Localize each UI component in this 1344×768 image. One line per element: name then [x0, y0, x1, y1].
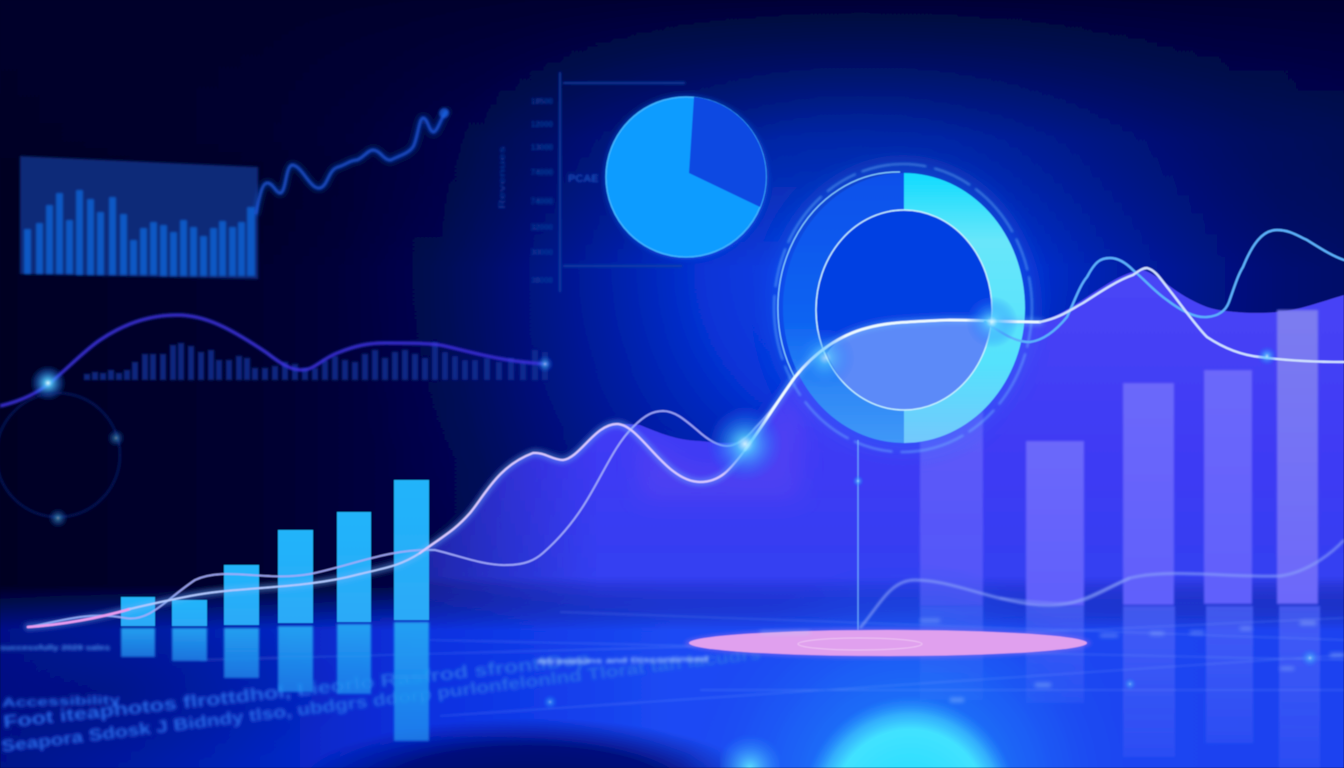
lower right wave	[860, 540, 1344, 628]
bars	[121, 480, 429, 626]
wide glow	[680, 560, 1140, 768]
area highlight under main wave	[640, 395, 800, 500]
inner lower disc	[827, 322, 992, 410]
dome	[800, 697, 1020, 768]
axis labels: 12000	[531, 120, 554, 129]
base line	[10, 383, 560, 385]
chart: mid-left wave with histogram	[0, 315, 560, 406]
wave line	[0, 315, 548, 406]
node	[30, 365, 66, 401]
text line: Nfrmations and Discontinued	[538, 656, 708, 666]
pie glow	[603, 94, 769, 260]
platform glow	[685, 628, 1091, 658]
main glowing wave	[28, 230, 1344, 627]
right bars	[920, 310, 1318, 606]
orbit circle with nodes	[0, 393, 125, 528]
right bar reflections	[920, 606, 1320, 768]
outer thin arc	[778, 172, 900, 378]
secondary light wave	[30, 385, 790, 627]
node	[536, 355, 554, 373]
small histogram	[84, 342, 548, 380]
floor grid	[200, 612, 1344, 716]
histogram bars	[24, 190, 255, 276]
trend line	[256, 112, 446, 213]
glow points	[542, 296, 1320, 710]
bar reflections	[121, 622, 429, 741]
platform ring	[798, 638, 922, 650]
text line: Seapora Sdosk J Bidndy tlso, ubdgrs ddorp purlonfelonlnd Tlorat tan lacudrs	[0, 644, 762, 756]
floor	[0, 585, 1344, 768]
wave bright section	[745, 320, 1040, 450]
chart: pie with axis	[497, 72, 769, 292]
blurred floor text	[0, 644, 762, 756]
node	[48, 508, 68, 528]
wave lilac section	[420, 424, 745, 553]
pie label: PCAE	[568, 173, 599, 185]
tick labels around ring	[774, 164, 1032, 452]
right wave B	[1040, 268, 1344, 362]
axis labels: 74000	[531, 197, 554, 206]
axis labels	[531, 97, 554, 285]
bottom cyan glow	[680, 560, 1140, 768]
axis labels: 38000	[531, 276, 554, 285]
right wave A	[985, 230, 1344, 342]
text line: successfully 2029 sales	[0, 645, 110, 652]
axis title: Revenues	[497, 146, 507, 209]
wave glow	[28, 320, 1040, 627]
node	[107, 429, 125, 447]
platform	[689, 630, 1087, 656]
wave pale section	[130, 553, 420, 609]
dark slice	[689, 97, 766, 207]
stem node	[852, 475, 864, 487]
axis frame	[560, 72, 685, 292]
orbit	[0, 393, 120, 517]
pie disc	[606, 97, 766, 257]
axis labels: 74000	[531, 168, 554, 177]
ring glow	[775, 166, 1031, 450]
axis labels: 13000	[531, 143, 554, 152]
axis labels: 18500	[531, 97, 554, 106]
purple area chart	[420, 270, 1344, 632]
arrow tip	[439, 108, 449, 118]
lower right wave 2	[1000, 578, 1130, 603]
right ring segment	[904, 173, 1025, 443]
small side glow	[720, 734, 780, 768]
text line: Accessibility	[2, 692, 121, 710]
axis labels: 32000	[531, 223, 554, 232]
vertical stem	[852, 440, 864, 630]
floor specks	[760, 619, 1344, 702]
panel background	[20, 156, 258, 279]
wave purple section	[28, 609, 130, 627]
inner disc	[816, 210, 992, 410]
pink platform	[685, 628, 1091, 658]
left ring segment	[783, 173, 904, 443]
ring chart	[774, 164, 1032, 452]
inner outline	[816, 210, 992, 410]
left bars	[121, 480, 429, 741]
panel: top-left bar chart with trend line	[20, 108, 449, 279]
axis labels: 30000	[531, 248, 554, 257]
text line: Foot iteaphotos flrottdhol, Lieorlo Rasfrod sfrontlDsp	[2, 648, 591, 732]
